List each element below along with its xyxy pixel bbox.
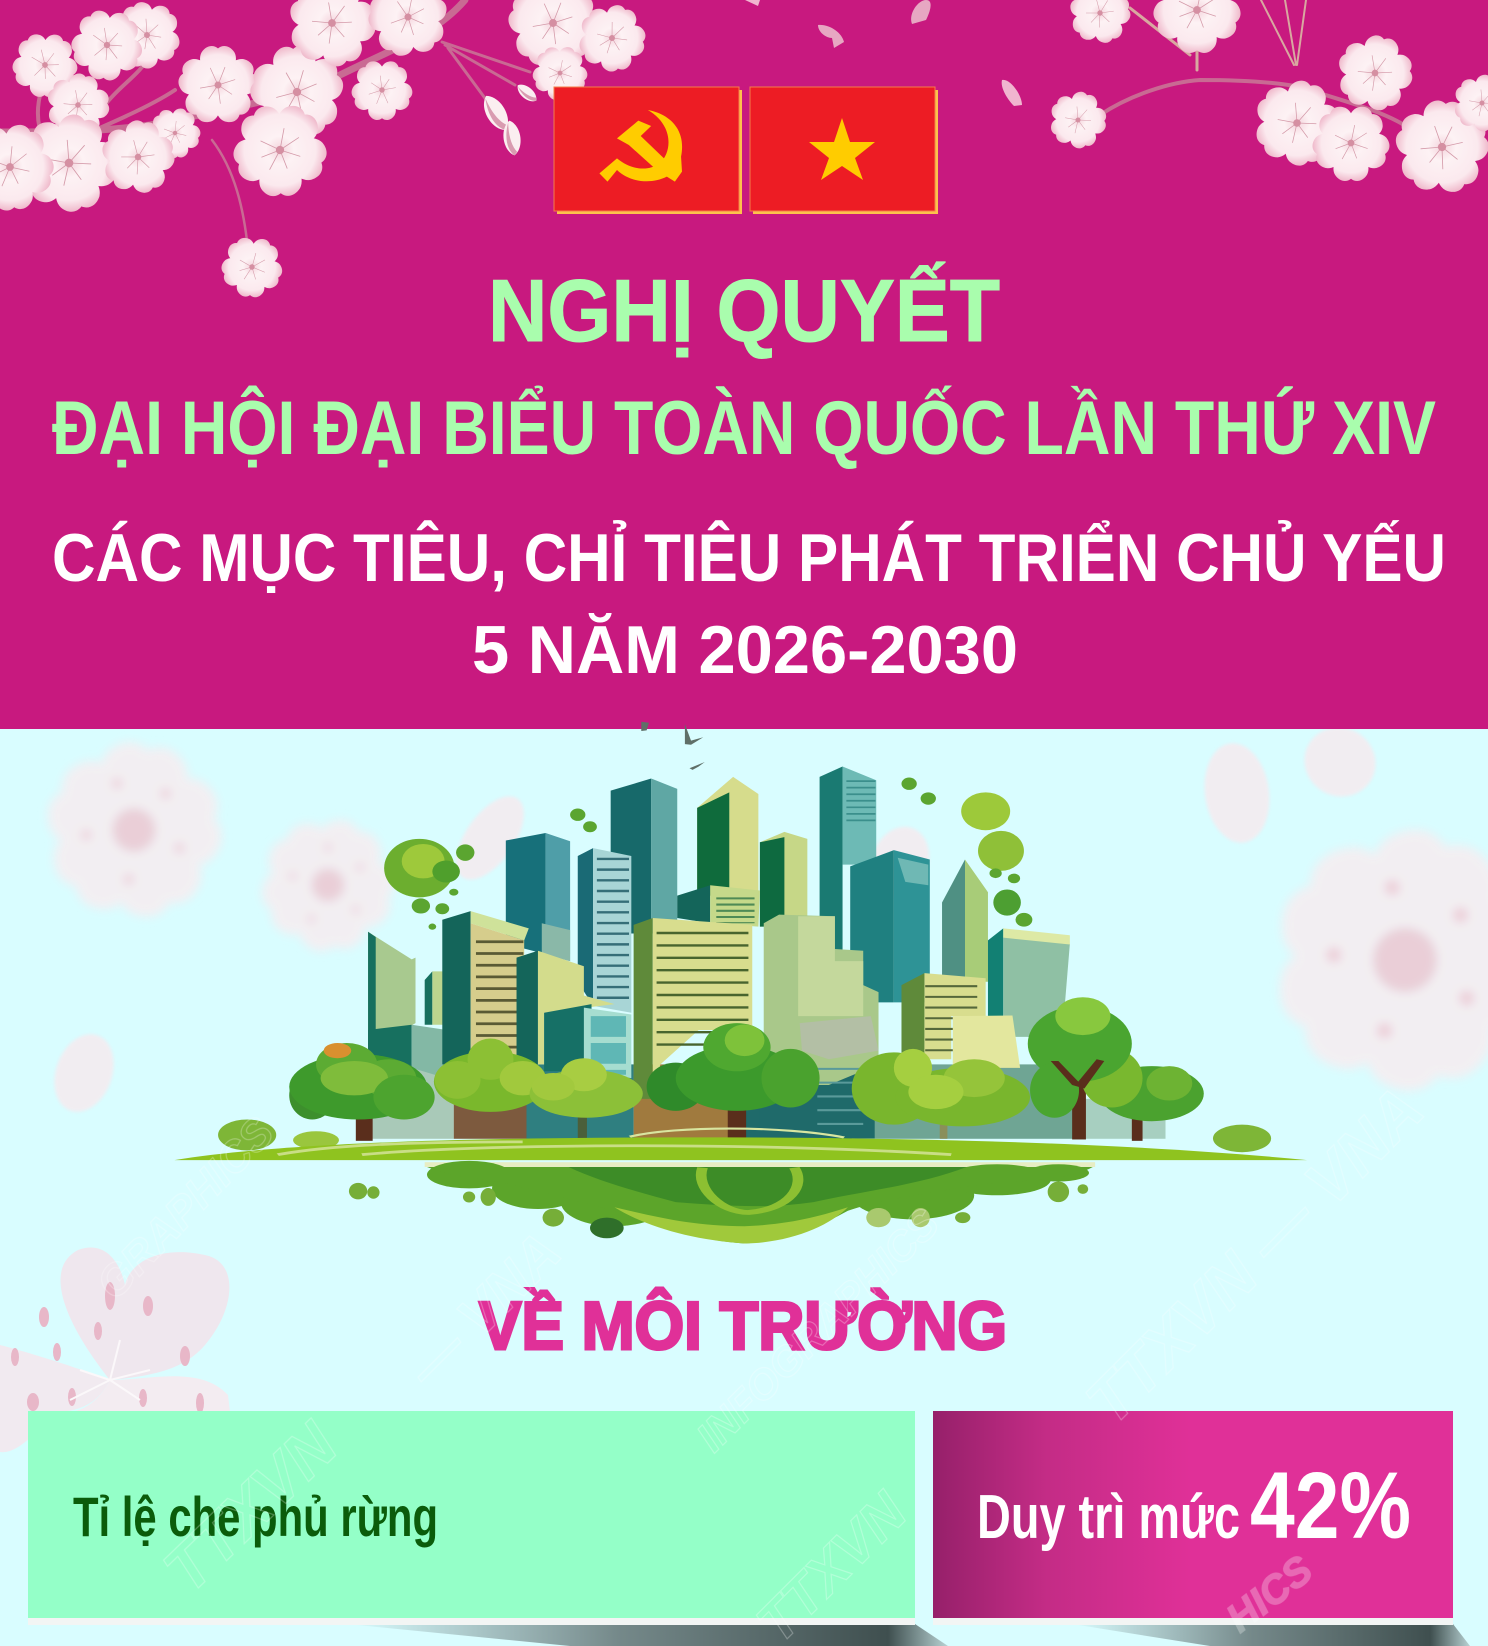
watermarks: TTXVN — VNA [1072, 1073, 1437, 1438]
shrubs [218, 1119, 1271, 1152]
title: NGHỊ QUYẾT [488, 261, 1000, 360]
panel: indicator label [28, 1411, 915, 1625]
cherry branch left [0, 0, 659, 313]
background blurred blossoms [23, 715, 1488, 1141]
back towers [506, 766, 1070, 1037]
panel shadow left [347, 1624, 948, 1646]
panel shadow right [1072, 1624, 1470, 1646]
watermarks [87, 1073, 1437, 1646]
flag: party [554, 87, 742, 214]
panel: indicator value [933, 1411, 1453, 1625]
watermarks: — VNA [393, 1220, 573, 1399]
value number: 42% [1250, 1453, 1411, 1559]
background blossom lower left [0, 1248, 230, 1452]
watermarks: INFOGRAPHICS [687, 1199, 948, 1460]
flag: Vietnam [750, 87, 938, 214]
floating foliage [384, 778, 1032, 930]
watermarks: HICS [1218, 1547, 1321, 1641]
trunks [356, 1064, 1143, 1141]
section heading: VỀ MÔI TRƯỜNG [479, 1287, 1007, 1364]
central buildings [634, 885, 1020, 1138]
front left buildings [368, 911, 631, 1082]
heading line 2: 5 NĂM 2026-2030 [472, 612, 1018, 688]
label text: Tỉ lệ che phủ rừng [73, 1485, 438, 1548]
watermarks: GRAPHICS [87, 1108, 284, 1309]
ground [174, 1129, 1307, 1243]
header panel [0, 0, 1488, 729]
cherry branch right [745, 0, 1488, 201]
value label: Duy trì mức [977, 1483, 1240, 1552]
trees [289, 997, 1204, 1126]
watermarks: TTXVN [150, 1407, 352, 1606]
illustration: green city [174, 722, 1307, 1243]
birds [641, 722, 705, 770]
base blocks behind trees [370, 1064, 1166, 1139]
